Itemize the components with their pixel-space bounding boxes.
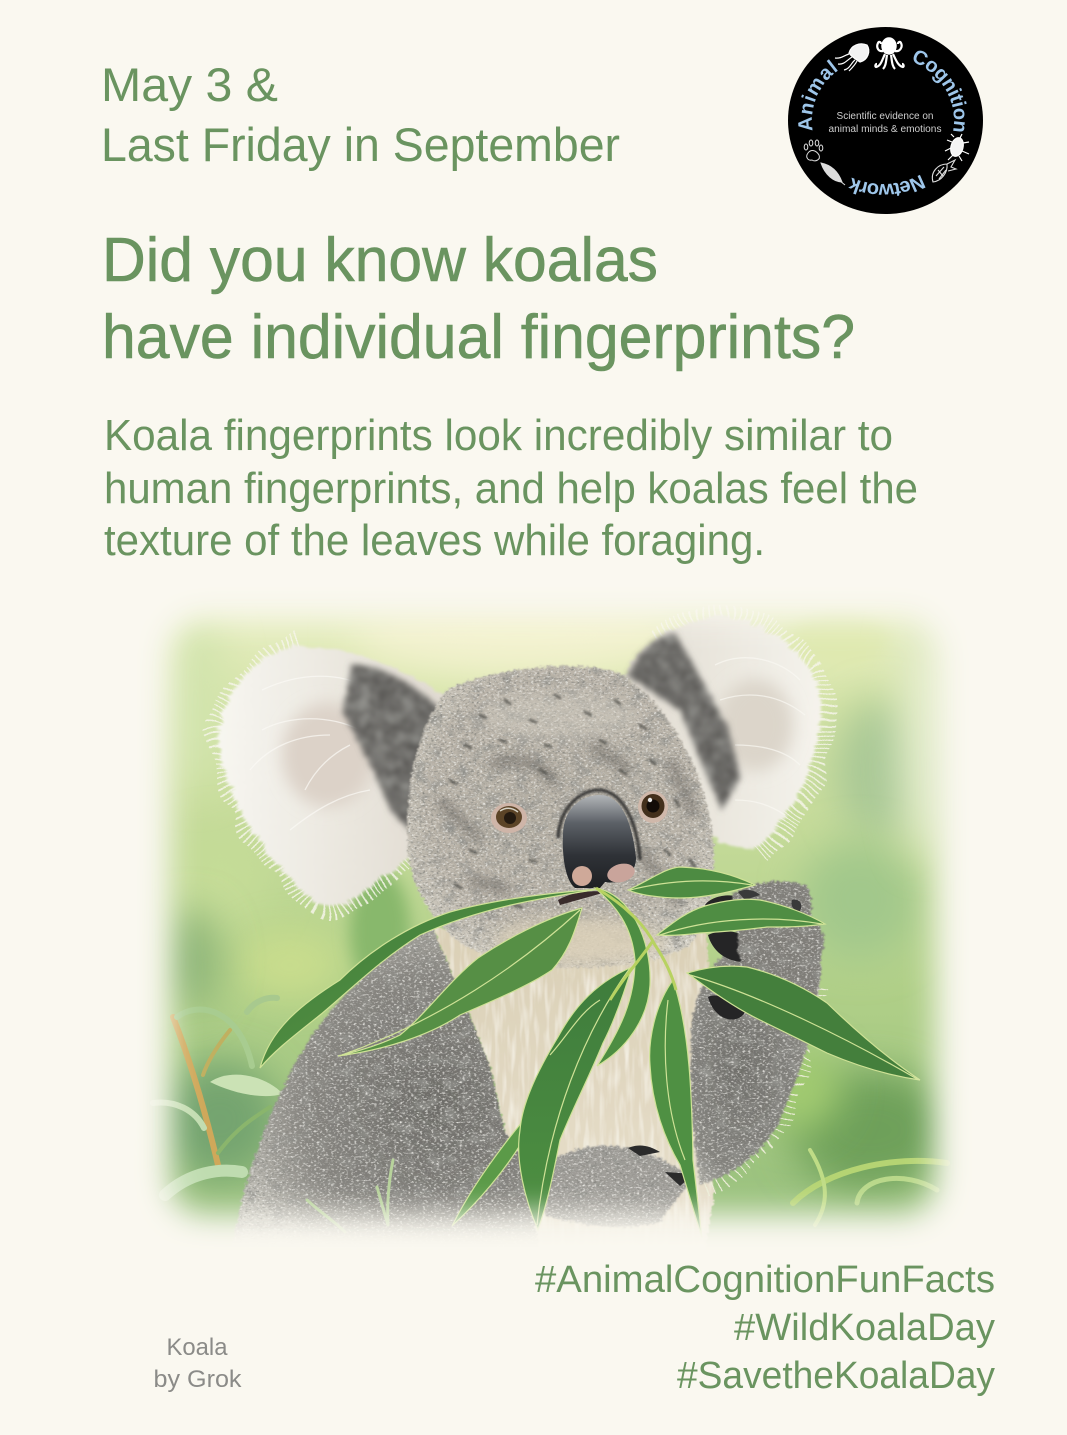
hashtags [535, 1259, 995, 1397]
main title: Did you know koalas [102, 226, 658, 295]
leaf: centre curved [595, 888, 650, 1066]
illustration background foliage [149, 604, 958, 1235]
face shading and chin fur [440, 691, 695, 966]
left ear [218, 645, 455, 907]
right ear dark band [628, 632, 740, 810]
main title: have individual fingerprints? [102, 303, 855, 372]
chest fur [432, 920, 715, 1250]
forehead flecks [450, 695, 694, 907]
right arm [690, 945, 820, 1190]
leaf: small lower [452, 1122, 522, 1226]
body text: texture of the leaves while foraging. [104, 516, 765, 565]
background grass [153, 998, 947, 1225]
dark palm and fingers [705, 895, 745, 1020]
left ear inner shading [282, 703, 374, 807]
leaf: left wide [338, 908, 582, 1056]
hashtags: #AnimalCognitionFunFacts [535, 1259, 995, 1301]
date heading: Last Friday in September [101, 118, 620, 171]
leaf: big centre down [519, 967, 632, 1230]
hashtags: #WildKoalaDay [734, 1307, 995, 1349]
lower hand [545, 1146, 692, 1227]
hashtags: #SavetheKoalaDay [677, 1355, 995, 1397]
upper hand [705, 881, 824, 1020]
logo ring lettering: Animal [798, 59, 838, 130]
icon: beetle [945, 134, 969, 161]
right ear inner shading [717, 679, 793, 771]
icon: paw [804, 140, 823, 161]
logo ring lettering: Cognition [914, 50, 967, 132]
body [236, 930, 535, 1234]
logo ring lettering: Network [848, 174, 926, 196]
date heading [101, 58, 620, 171]
leaf: right down [650, 980, 702, 1238]
foreground grass [307, 1160, 393, 1232]
logo ring lettering [798, 50, 967, 196]
leaf: upper right [657, 899, 825, 935]
icon: octopus [875, 38, 904, 69]
logo tagline: animal minds & emotions [828, 124, 942, 135]
image credit: Koala [166, 1334, 228, 1361]
logo tagline: Scientific evidence on [836, 111, 934, 122]
image credit: by Grok [154, 1366, 243, 1393]
eyes [491, 791, 668, 833]
right ear [625, 616, 820, 850]
koala illustration [149, 604, 958, 1236]
logo tagline [828, 111, 942, 135]
icon: feather [821, 163, 845, 185]
body text [104, 411, 918, 565]
leaf: top right [628, 867, 755, 898]
date heading: May 3 & [101, 58, 278, 111]
left ear bristles [222, 648, 408, 904]
icon: jellyfish [835, 44, 869, 71]
right ear bristles [660, 620, 820, 850]
eucalyptus leaves [260, 867, 920, 1238]
image credit [154, 1334, 243, 1393]
icon: fish [932, 160, 956, 182]
leaf: lower right [687, 966, 920, 1080]
left ear dark band [343, 665, 445, 830]
arm bristles [700, 985, 820, 1190]
body text: Koala fingerprints look incredibly similar to [104, 411, 893, 460]
nose [558, 790, 640, 905]
stem [596, 888, 676, 1000]
leaf: long left [260, 889, 600, 1068]
head [407, 666, 714, 968]
main title [102, 226, 855, 372]
claws [628, 1146, 684, 1186]
body text: human fingerprints, and help koalas feel the [104, 464, 918, 513]
logo: Animal Cognition Network [788, 27, 983, 214]
